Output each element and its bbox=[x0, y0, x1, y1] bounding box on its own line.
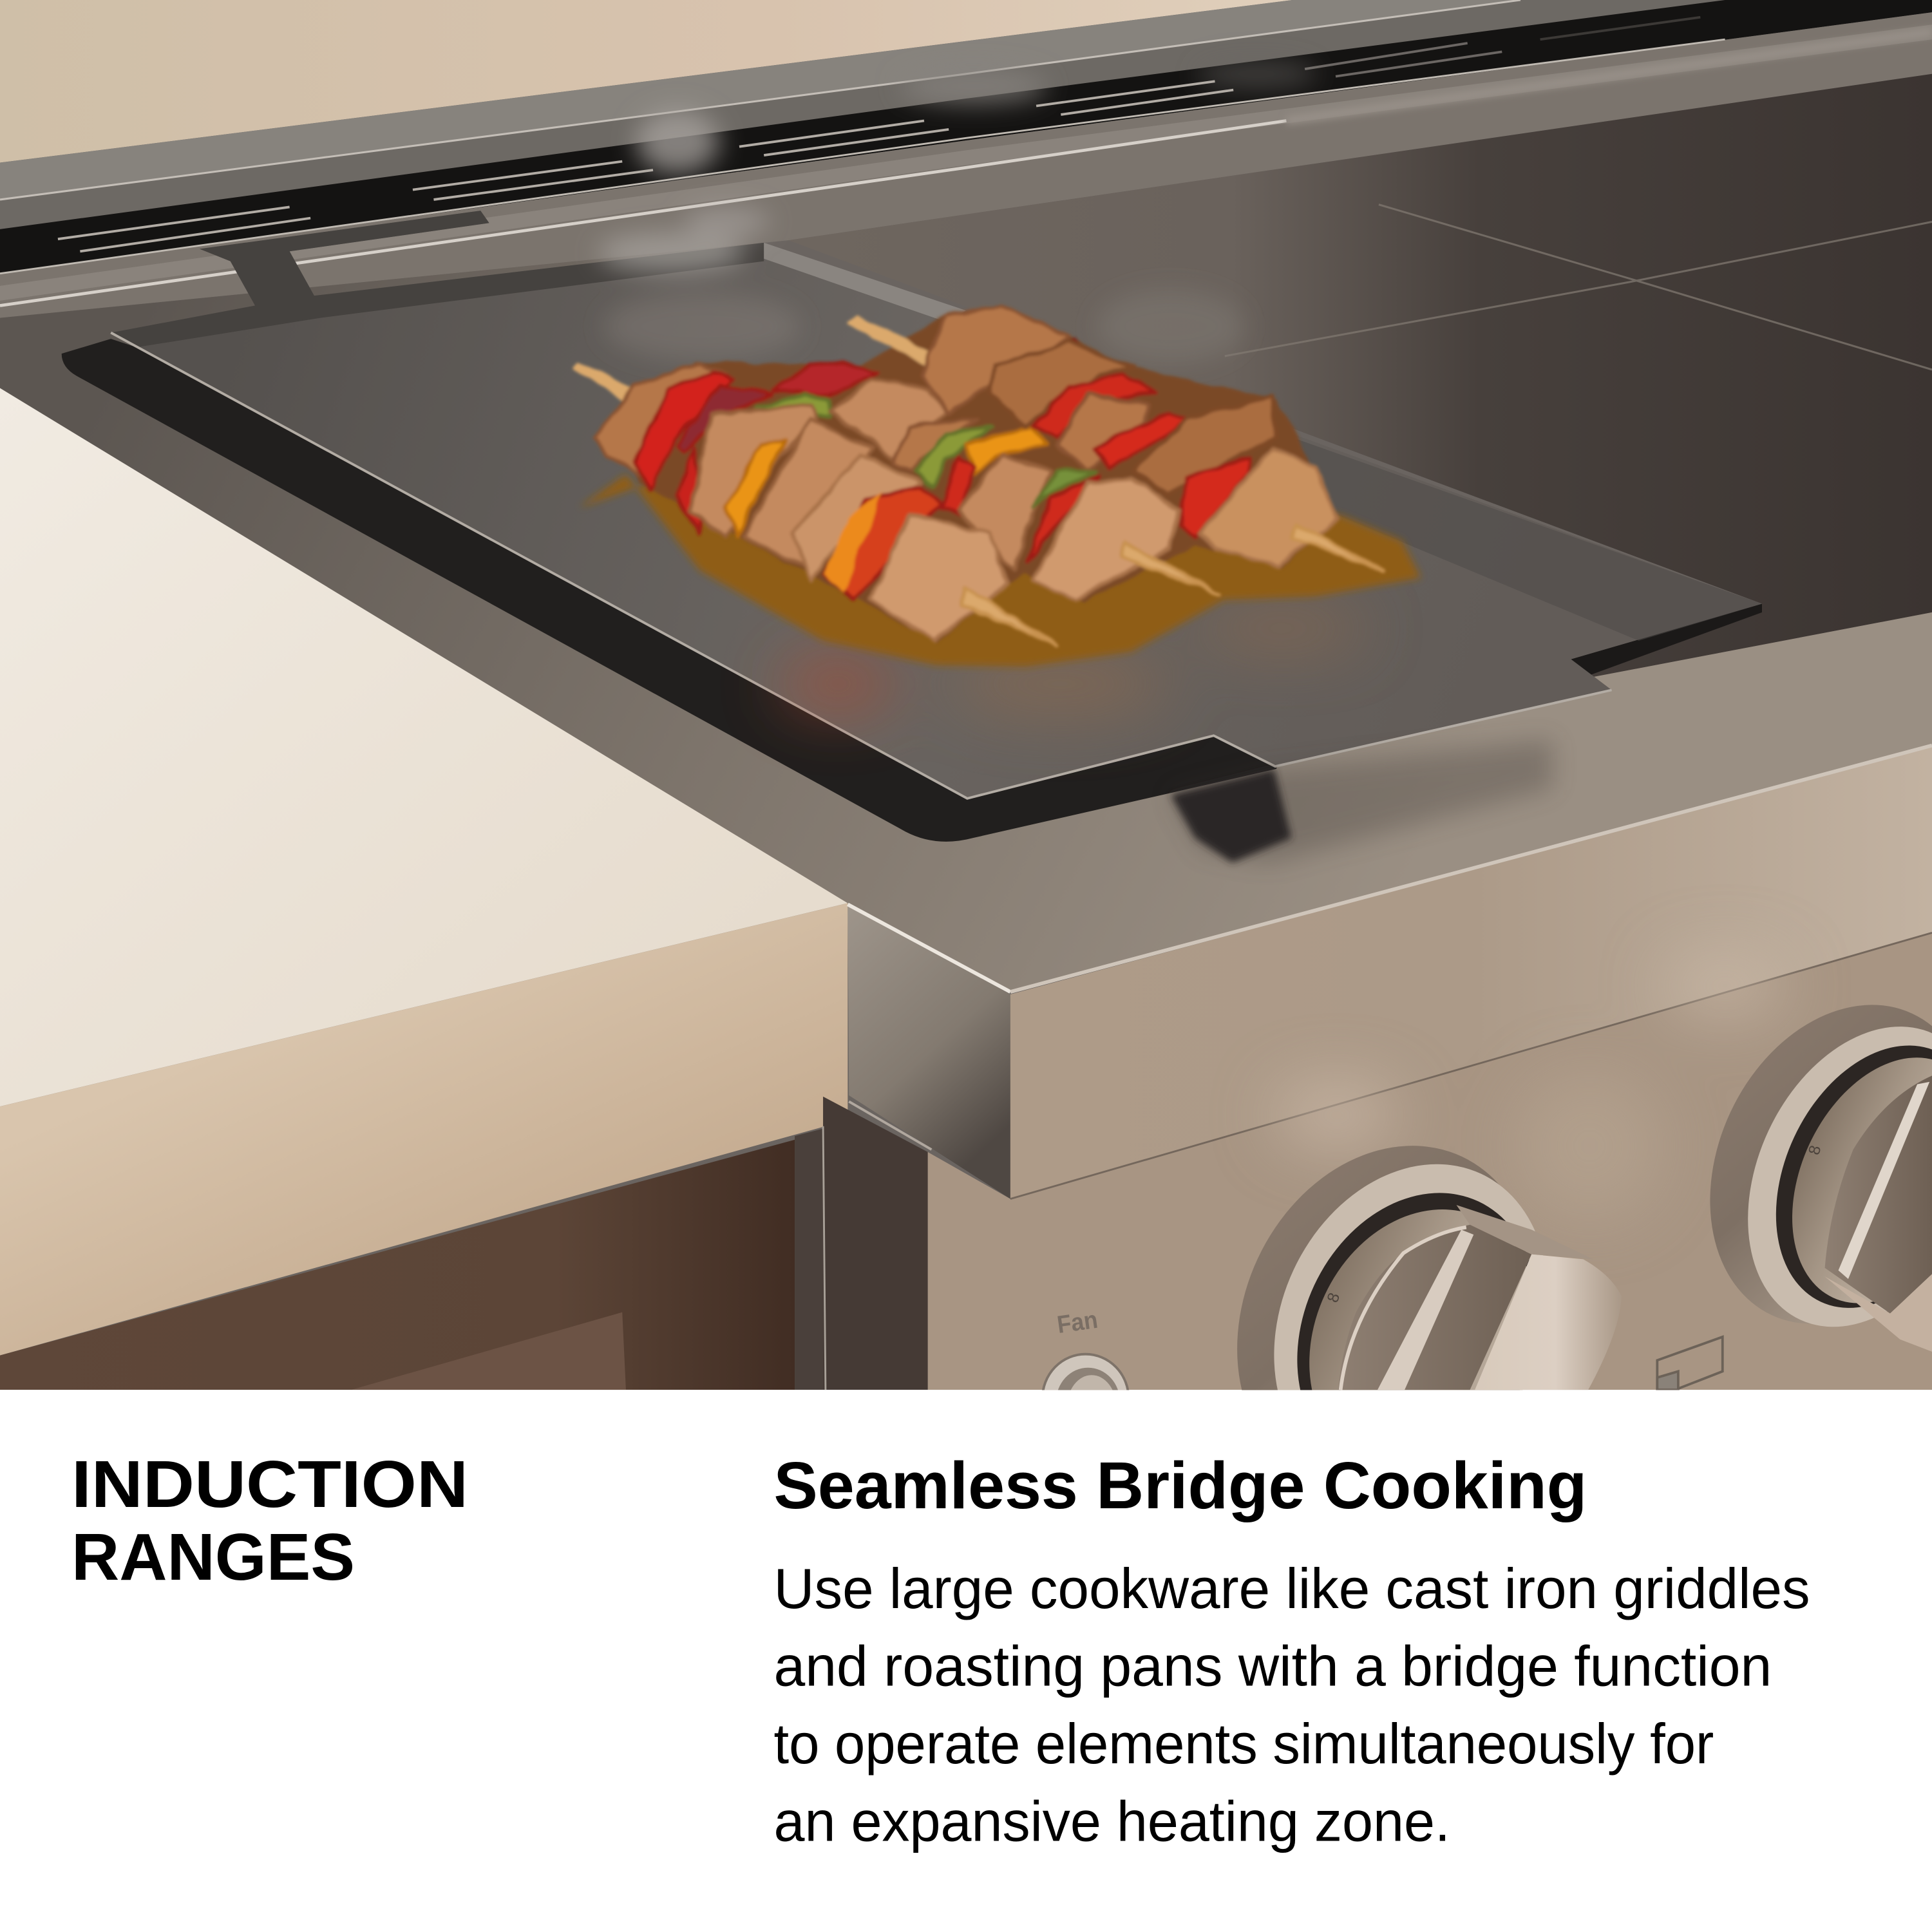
vent slots bbox=[58, 17, 1700, 251]
cooktop zone lines bbox=[1225, 205, 1932, 370]
middle skewer back pieces bbox=[755, 363, 1051, 571]
fan button bbox=[1043, 1354, 1129, 1443]
back stick bbox=[850, 318, 943, 370]
knob right bbox=[1660, 961, 1932, 1367]
cabinet dark post bbox=[795, 1129, 823, 1390]
back rail black vent band bbox=[0, 0, 1932, 274]
knob ring bbox=[1223, 1119, 1598, 1530]
heading: product category bbox=[71, 1446, 468, 1594]
right handle face bbox=[1825, 1075, 1932, 1314]
steel gap strip bbox=[849, 1101, 931, 1150]
counter top bbox=[0, 388, 848, 1106]
knob base bbox=[1182, 1097, 1590, 1540]
range front lip bbox=[1010, 746, 1932, 1199]
griddle tip shadow bbox=[1571, 604, 1762, 675]
cooktop glass bbox=[788, 74, 1932, 677]
body text bbox=[774, 1557, 1810, 1853]
cabinet bbox=[0, 1140, 795, 1390]
right knob dial bbox=[1755, 1027, 1932, 1334]
griddle recess shadow bbox=[62, 339, 1282, 842]
wall bbox=[0, 0, 1293, 163]
handle face bbox=[1338, 1225, 1531, 1390]
back stick tip bbox=[1294, 524, 1384, 571]
range side corner bbox=[848, 904, 1010, 1199]
range control panel bbox=[928, 933, 1932, 1390]
left stick bbox=[574, 363, 634, 402]
right knob base bbox=[1660, 961, 1932, 1367]
middle stick tip bbox=[1121, 542, 1220, 594]
knob gap bbox=[1253, 1153, 1581, 1513]
back rail upper steel bbox=[0, 0, 1520, 200]
front stick tip bbox=[961, 588, 1057, 646]
body text: and roasting pans with a bridge function bbox=[774, 1634, 1772, 1698]
panel icon bbox=[1657, 1337, 1723, 1390]
front skewer pieces bbox=[595, 363, 1008, 641]
body text: to operate elements simultaneously for bbox=[774, 1712, 1714, 1776]
right handle highlight bbox=[1839, 1082, 1929, 1279]
skewers bbox=[574, 305, 1384, 646]
counter front bbox=[0, 903, 848, 1356]
panel shading near knobs bbox=[1275, 954, 1786, 1220]
tube highlights bbox=[0, 32, 1932, 305]
cabinet drawer bbox=[351, 1312, 626, 1390]
heading: product category: RANGES bbox=[71, 1519, 355, 1594]
steel edges bbox=[848, 746, 1932, 1199]
back skewer pieces bbox=[922, 305, 1337, 567]
right knob gap bbox=[1736, 1012, 1932, 1341]
right knob ring bbox=[1702, 988, 1932, 1365]
steel top surface bbox=[0, 240, 1932, 992]
food backing shadow bbox=[604, 308, 1337, 641]
photo: induction range with griddle and skewers bbox=[0, 0, 1932, 1540]
griddle back-right rim bbox=[764, 243, 966, 323]
handle top band bbox=[1456, 1205, 1593, 1259]
fan label: Fan bbox=[1056, 1306, 1099, 1339]
heading: product category: INDUCTION bbox=[71, 1446, 468, 1521]
handle face highlight bbox=[1341, 1227, 1466, 1390]
knob dial numbers: 8 bbox=[1323, 1291, 1343, 1305]
steam above griddle bbox=[598, 207, 1244, 363]
right handle cap bbox=[1825, 1274, 1932, 1352]
tube shadow band bbox=[0, 24, 1932, 301]
rail highlight line bbox=[0, 0, 1520, 200]
body text: an expansive heating zone. bbox=[774, 1789, 1450, 1853]
griddle tab bbox=[111, 211, 764, 348]
handle cap bbox=[1475, 1255, 1622, 1390]
oil pool bbox=[579, 468, 1421, 667]
griddle handle shadow bbox=[1171, 739, 1553, 862]
back rail lower tube bbox=[0, 12, 1932, 318]
knob left bbox=[1182, 1097, 1622, 1540]
middle skewer front pieces bbox=[1027, 471, 1180, 600]
range dark side bbox=[823, 1097, 928, 1390]
side trim line bbox=[823, 1126, 826, 1390]
steam on rail bbox=[636, 59, 1318, 174]
back rail lower steel face bbox=[0, 0, 1725, 229]
heading: feature title: Seamless Bridge Cooking bbox=[774, 1448, 1587, 1522]
photo base tone bbox=[0, 0, 1932, 1390]
knob dial bbox=[1267, 1172, 1578, 1510]
body text: Use large cookware like cast iron griddles bbox=[774, 1557, 1810, 1620]
griddle plate bbox=[111, 211, 1762, 799]
reflection of food on griddle bbox=[779, 606, 1368, 715]
right knob dial number: 8 bbox=[1805, 1144, 1824, 1157]
